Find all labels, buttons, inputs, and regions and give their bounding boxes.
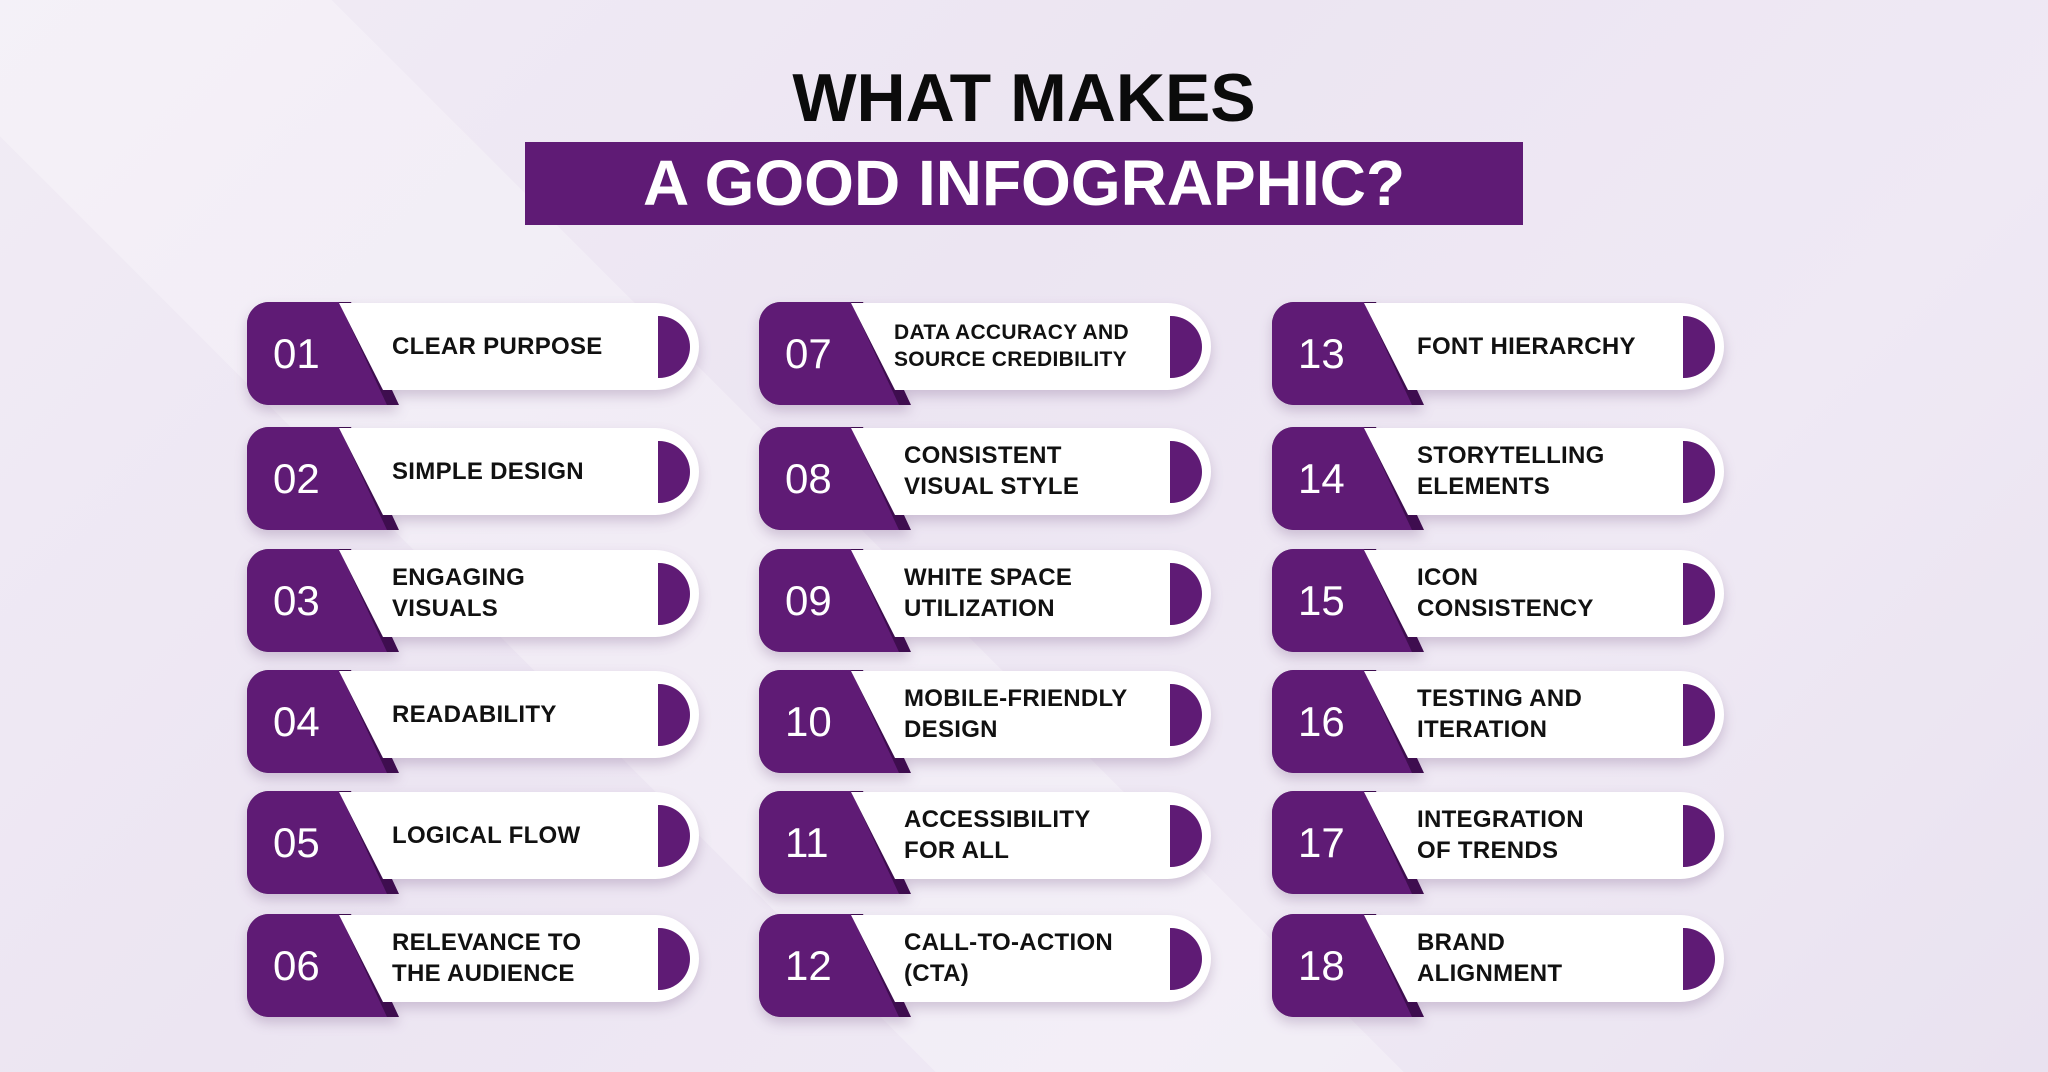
card 03: ENGAGING [392,564,525,591]
card 03: VISUALS [392,595,498,622]
card 11 [754,791,1216,906]
card 02 [242,427,704,541]
card 10: DESIGN [904,716,998,743]
card 11: 11 [785,819,829,866]
card 01: 01 [273,330,320,377]
card 06: RELEVANCE TO [392,929,581,956]
card 09 [754,549,1216,664]
card 07: 07 [785,330,832,377]
card 14: STORYTELLING [1417,442,1605,469]
card 01: CLEAR PURPOSE [392,332,603,360]
card 06: 06 [273,942,320,989]
card 16: ITERATION [1417,716,1547,743]
card 01 [242,302,704,416]
card 13: 13 [1298,330,1345,377]
card 03: 03 [273,577,320,624]
card 15: CONSISTENCY [1417,595,1594,622]
card 16: 16 [1298,698,1345,745]
card 18: 18 [1298,942,1345,989]
card 17 [1266,791,1728,906]
card 02: 02 [273,455,320,502]
card 06: THE AUDIENCE [392,960,575,987]
card 08 [754,427,1216,542]
card 08: CONSISTENT [904,442,1062,469]
card 17: 17 [1298,819,1345,866]
card 12: 12 [785,942,832,989]
card 17: INTEGRATION [1417,806,1584,833]
card 05 [242,791,704,905]
card 09: 09 [785,577,832,624]
card 16 [1266,670,1728,784]
card 07: DATA ACCURACY AND [894,321,1129,344]
card 15: 15 [1298,577,1345,624]
card 08: 08 [785,455,832,502]
card 09: UTILIZATION [904,595,1055,622]
card 10: MOBILE-FRIENDLY [904,685,1128,712]
card 17: OF TRENDS [1417,837,1558,864]
card 05: 05 [273,819,320,866]
card 09: WHITE SPACE [904,564,1072,591]
card 06 [242,914,704,1028]
card 16: TESTING AND [1417,685,1582,712]
card 03 [242,549,704,663]
card 10: 10 [785,698,832,745]
card 04: 04 [273,698,320,745]
card 15 [1267,549,1728,664]
card 07 [754,302,1216,416]
title banner [525,142,1523,225]
card 13 [1267,302,1729,416]
card 12 [754,914,1216,1028]
card 12: (CTA) [904,960,969,987]
card 10 [754,670,1216,784]
card 14: ELEMENTS [1417,473,1550,500]
card 18: ALIGNMENT [1417,960,1562,987]
title: WHAT MAKES [792,60,1256,136]
card 02: SIMPLE DESIGN [392,458,584,484]
card 11: FOR ALL [904,837,1009,864]
card 13: FONT HIERARCHY [1417,332,1636,360]
card 04: READABILITY [392,700,557,728]
card 14: 14 [1298,455,1345,502]
card 04 [242,670,704,784]
card 12: CALL-TO-ACTION [904,929,1113,956]
card 18: BRAND [1417,929,1505,956]
card 07: SOURCE CREDIBILITY [894,348,1127,371]
card 08: VISUAL STYLE [904,473,1079,500]
card 11: ACCESSIBILITY [904,806,1091,833]
card 18 [1266,914,1728,1028]
card 05: LOGICAL FLOW [392,822,580,848]
card 15: ICON [1417,564,1478,591]
title banner: A GOOD INFOGRAPHIC? [643,147,1405,219]
card 14 [1267,427,1729,541]
